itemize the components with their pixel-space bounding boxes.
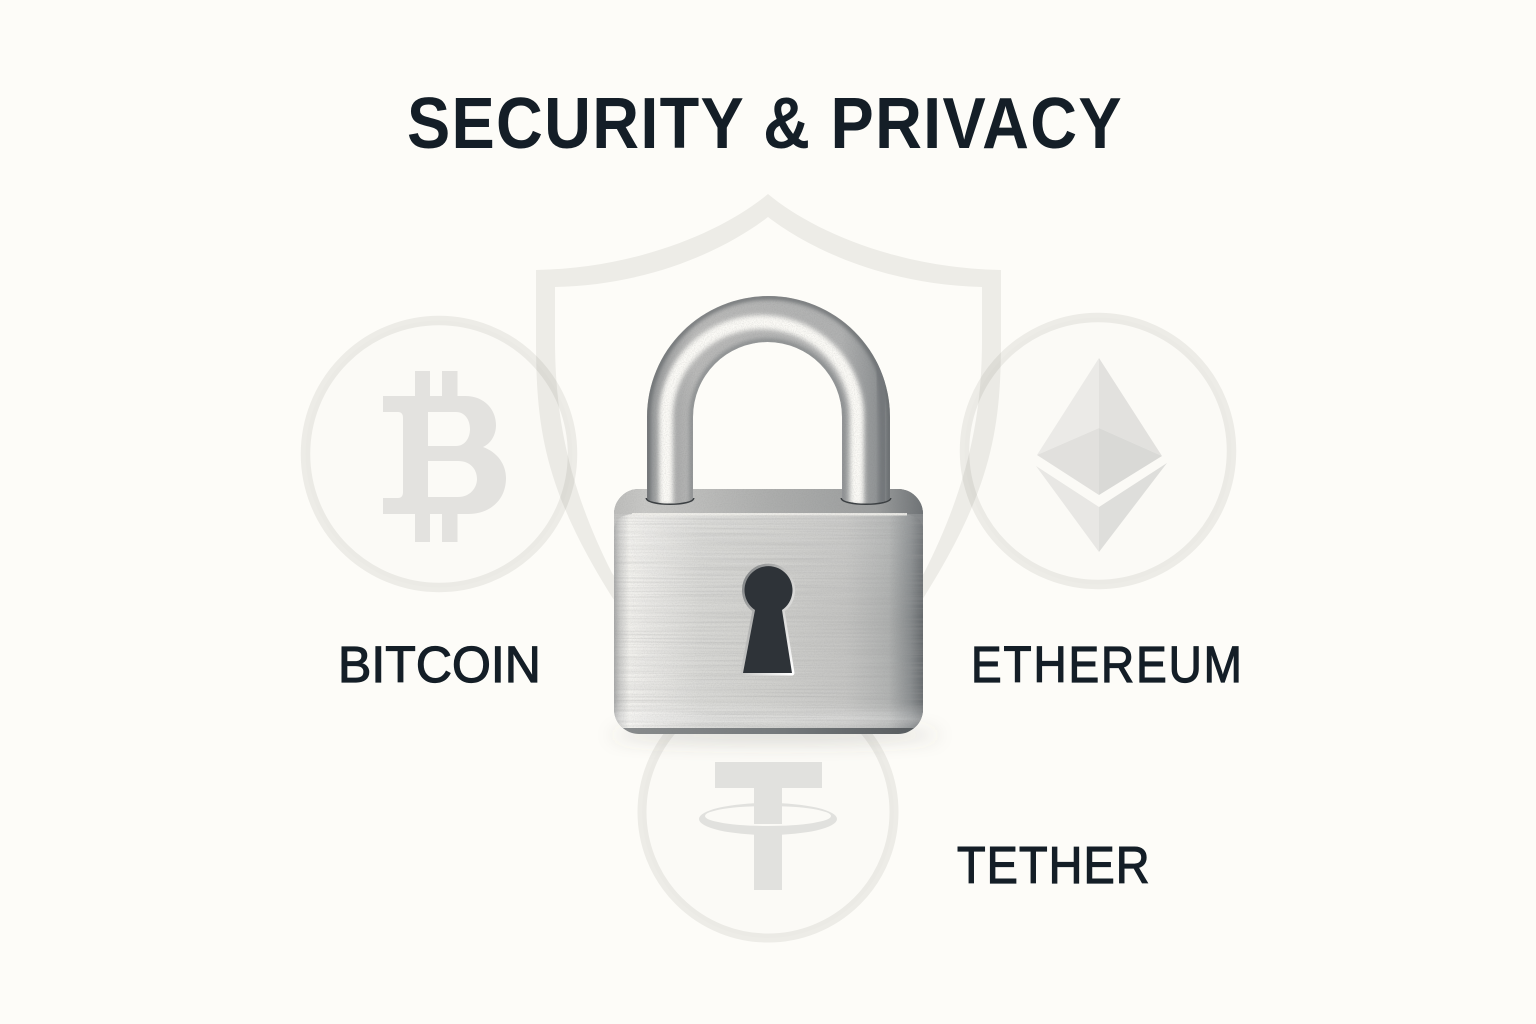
label: ethereum: ETHEREUM bbox=[971, 637, 1242, 694]
coin: tether bbox=[642, 686, 894, 938]
coin: ethereum bbox=[964, 318, 1232, 584]
ethereum ring bbox=[964, 318, 1232, 584]
shield outline bbox=[536, 194, 1001, 715]
label: bitcoin: BITCOIN bbox=[338, 636, 541, 693]
bitcoin ring bbox=[306, 320, 572, 588]
bitcoin symbol bbox=[383, 371, 506, 542]
coin: bitcoin bbox=[306, 320, 572, 588]
tether ring bbox=[642, 686, 894, 938]
lock ground shadow bbox=[610, 728, 940, 742]
label: tether: TETHER bbox=[957, 837, 1150, 895]
lock shackle bbox=[640, 290, 896, 510]
lock keyhole bbox=[743, 566, 792, 673]
ethereum symbol bbox=[1036, 358, 1167, 552]
padlock bbox=[610, 290, 940, 742]
lock body bbox=[614, 489, 923, 734]
tether symbol bbox=[699, 762, 837, 890]
title: SECURITY & PRIVACY bbox=[407, 83, 1122, 164]
